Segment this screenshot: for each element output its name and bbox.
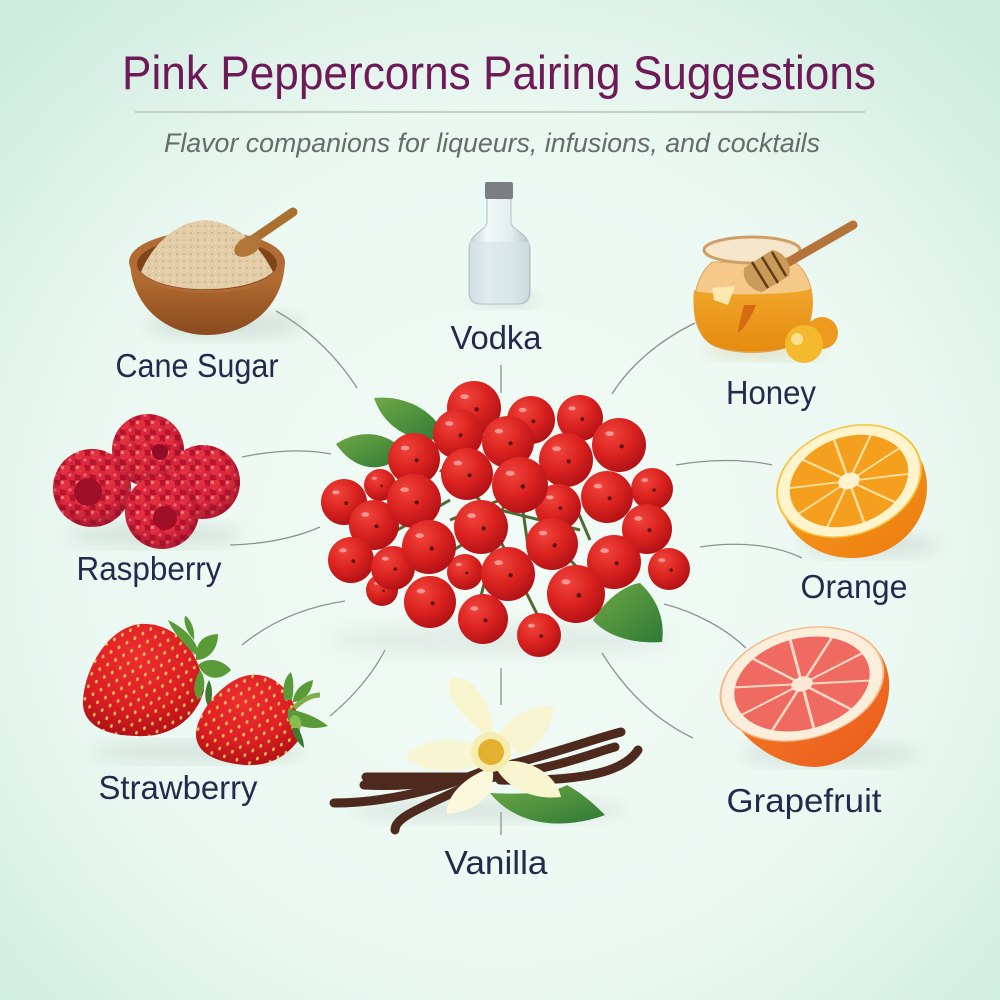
connector lines [230,311,802,835]
icon: cane sugar bowl [129,212,305,337]
icon: honey jar [694,225,853,363]
icon: vodka bottle [469,182,541,306]
berries [321,381,690,657]
label: cane sugar: Cane Sugar [116,347,279,384]
label: vanilla: Vanilla [444,844,548,881]
label: honey: Honey [726,374,816,411]
label: vodka: Vodka [450,319,542,356]
label: orange: Orange [800,568,908,605]
icon: vanilla flower and pods [334,677,638,830]
label: raspberry: Raspberry [76,550,222,587]
central peppercorn cluster [321,381,690,657]
icon: raspberries [53,414,245,549]
title: Pink Peppercorns Pairing Suggestions [122,46,876,99]
icon: grapefruit half [708,610,920,767]
label: grapefruit: Grapefruit [726,782,882,819]
label: strawberry: Strawberry [98,769,258,806]
leaves behind cluster [330,398,670,656]
icon: strawberries [83,616,328,765]
stems [380,470,600,620]
subtitle: Flavor companions for liqueurs, infusions, and cocktails [164,128,820,158]
icon: orange half [761,406,940,558]
